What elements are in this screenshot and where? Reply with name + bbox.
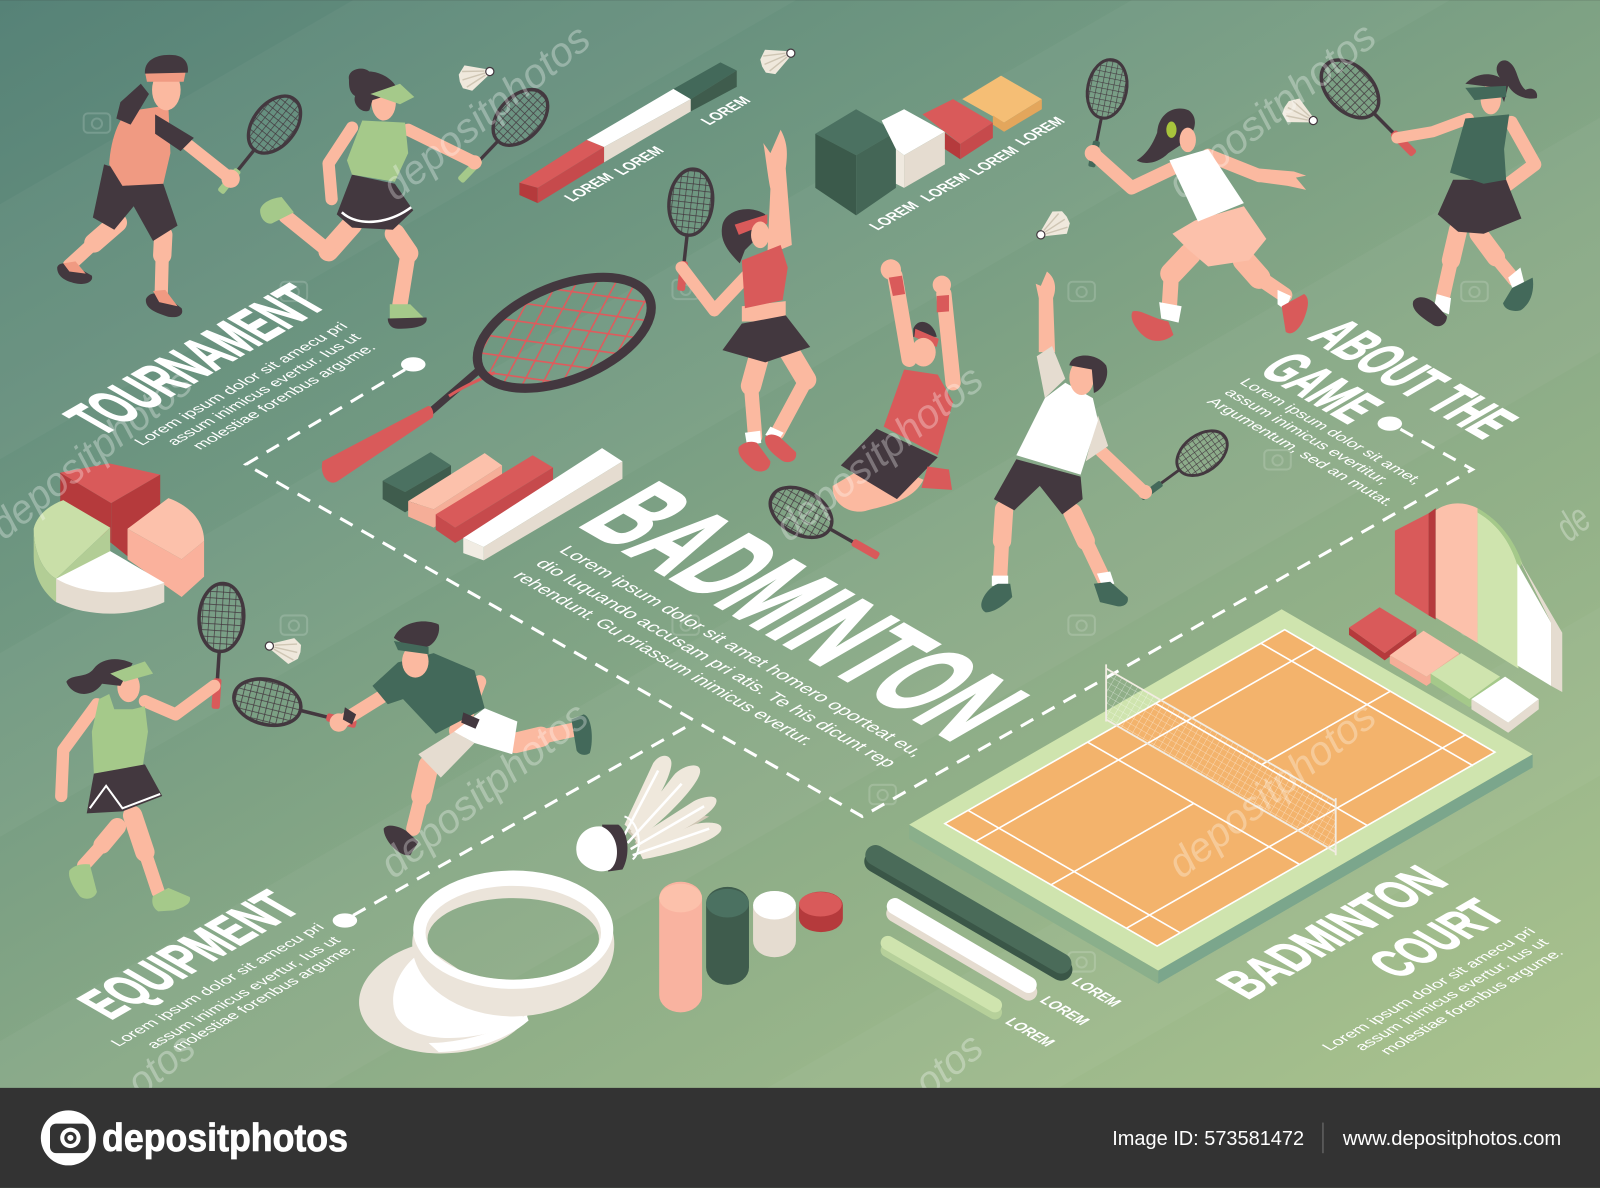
tournament text: molestiae forenbus argume. (189, 342, 380, 452)
pill bars with labels (876, 855, 1125, 1049)
depositphotos watermarks: otos (118, 1023, 204, 1105)
court markings (945, 630, 1495, 946)
player: woman in sage top with visor (260, 69, 482, 329)
player: man in green shirt lunging (330, 621, 592, 855)
heading: BADMINTON COURT (1204, 858, 1518, 1006)
court text: molestiae forenbus argume. (1376, 947, 1568, 1057)
equipment text: Lorem ipsum dolor sit amecu pri (107, 921, 329, 1049)
heading: BADMINTON COURT: BADMINTON (1204, 858, 1461, 1006)
net (1106, 664, 1336, 855)
chart: isometric step bars with labels: LOREM (1011, 115, 1069, 148)
chart: stripe bar with labels (519, 62, 755, 204)
heading: ABOUT THE GAME (1246, 310, 1532, 446)
icon: camera logo (41, 1110, 96, 1165)
court text: Lorem ipsum dolor sit amecu pri (1318, 925, 1540, 1053)
player: man in white shirt (981, 272, 1152, 612)
camera watermarks (84, 113, 1488, 972)
equipment text: assum inimicus evertur, Ius ut (143, 934, 346, 1051)
title: BADMINTON: BADMINTON (552, 466, 1057, 757)
player: woman with sage top bottom left (61, 659, 214, 911)
chart: isometric step bars with labels: LOREM (965, 144, 1023, 178)
footer bar (0, 1088, 1600, 1188)
player: jumping woman in red (682, 130, 810, 471)
small shuttlecocks (262, 39, 1323, 666)
connector dots (333, 357, 1402, 928)
player: man in salmon shirt (57, 55, 240, 317)
chart: iso pie (34, 463, 204, 614)
tournament text: Lorem ipsum dolor sit amecu pri (131, 320, 352, 448)
chart: isometric step bars with labels: LOREM (916, 171, 974, 204)
about text: Argumentum, sed an mutat. (1203, 396, 1399, 509)
depositphotos watermarks: depositphotos (1158, 692, 1384, 887)
depositphotos watermarks: otos (905, 1023, 991, 1105)
small rackets (193, 49, 1430, 746)
about text: Lorem ipsum dolor sit amet, (1235, 376, 1427, 487)
chart: four iso bars (383, 448, 622, 560)
badminton court (909, 609, 1533, 984)
player: woman in dark green top (1397, 60, 1537, 326)
main description: Lorem ipsum dolor sit amet homero oporteat eu, (555, 543, 930, 759)
footer bar: Image ID: 573581472 (1112, 1128, 1304, 1150)
footer bar: depositphotos (102, 1117, 348, 1160)
big racket (322, 255, 667, 483)
chart: stripe bar with labels: LOREM (610, 144, 668, 178)
visor band (412, 872, 614, 1016)
equipment text: molestiae forenbus argume. (168, 943, 360, 1053)
chart: isometric step bars with labels: LOREM (865, 199, 923, 233)
player: celebrating player in red (833, 259, 953, 512)
dashed flow lines (246, 370, 1472, 915)
main description: rehendunt. Gu priassum inimicus evertur. (509, 568, 820, 748)
heading: TOURNAMENT: TOURNAMENT (50, 276, 341, 444)
about text: assum inimicus evertitur, (1220, 386, 1394, 487)
pill bars with labels: LOREM (1001, 1016, 1059, 1049)
player: woman in white top and peach skirt (1085, 109, 1308, 341)
depositphotos watermarks: depositphotos (766, 356, 992, 550)
cylinders chart (659, 882, 843, 1012)
main description: dio luquando accusam pri atis. Te his dicunt rep (531, 556, 902, 770)
depositphotos watermarks: depositphotos (371, 692, 597, 887)
chart: right arc bars and squares (1349, 503, 1562, 733)
court text: assum inimicus evertur. Ius ut (1351, 936, 1554, 1053)
heading: EQUIPMENT: EQUIPMENT (63, 882, 314, 1027)
heading: ABOUT THE GAME: GAME (1246, 344, 1397, 431)
depositphotos watermarks: depositphotos (373, 15, 599, 209)
big sun visor (359, 871, 614, 1053)
chart: isometric step bars with labels (815, 76, 1069, 233)
depositphotos watermarks: depositphotos (1158, 13, 1384, 207)
footer bar: www.depositphotos.com (1342, 1128, 1561, 1150)
tournament text: assum inimicus evertur. Ius ut (163, 331, 366, 448)
big shuttlecock (576, 756, 721, 872)
heading: BADMINTON COURT: COURT (1355, 891, 1518, 986)
about text (1203, 376, 1427, 509)
visor rim (413, 871, 613, 989)
pill bars with labels: LOREM (1035, 994, 1093, 1028)
visor brim (359, 944, 529, 1053)
chart: stripe bar with labels: LOREM (697, 94, 755, 128)
chart: stripe bar with labels: LOREM (560, 171, 618, 204)
pill bars with labels: LOREM (1067, 976, 1125, 1009)
